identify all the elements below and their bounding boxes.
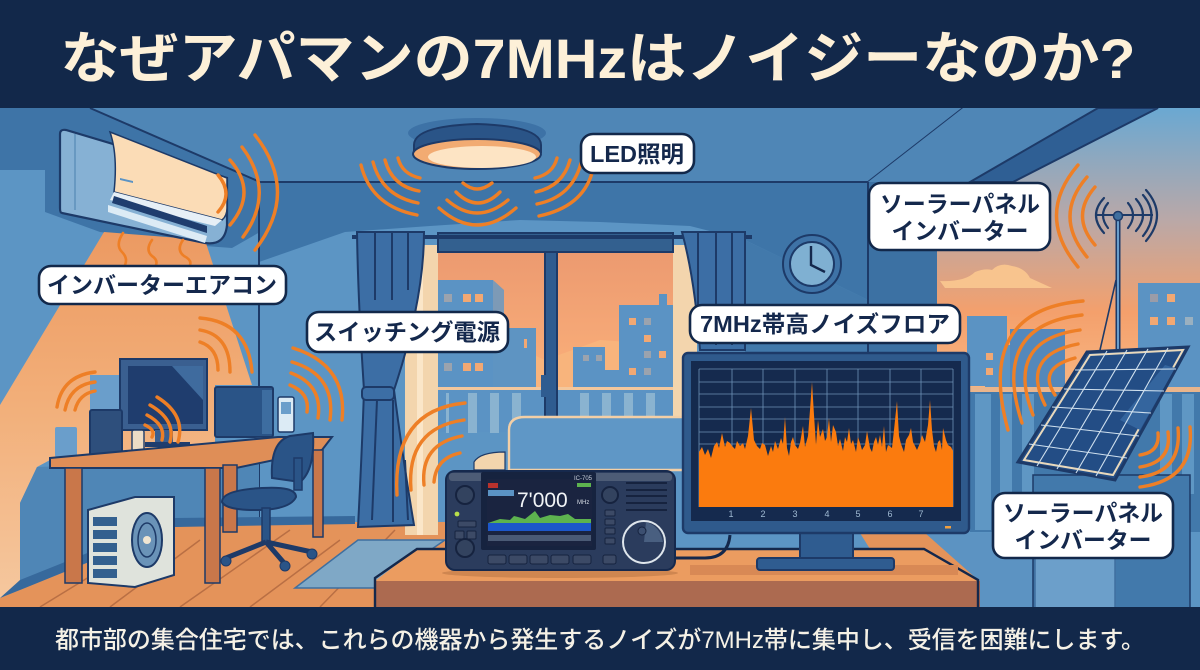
keyboard and mouse [178, 441, 248, 453]
radio display [487, 476, 593, 546]
ceiling light [408, 118, 546, 169]
label: inverter air conditioner [39, 266, 286, 304]
foreground table [375, 549, 980, 607]
desk and PC equipment [50, 359, 332, 583]
pc case [215, 387, 273, 437]
footer caption [0, 607, 1200, 670]
window frame [438, 233, 673, 252]
label: solar inverter bottom [993, 493, 1173, 558]
axis labels: 7 [918, 509, 924, 519]
noise waves: antenna and solar panel [1000, 165, 1095, 430]
title bar: なぜアパマンの7MHzはノイジーなのか? [60, 27, 1136, 90]
solar panel [1018, 347, 1188, 480]
curtains [352, 232, 752, 527]
label: high noise floor: 7MHz帯高ノイズフロア [700, 311, 950, 337]
axis labels: 4 [824, 509, 830, 519]
rug [295, 540, 445, 588]
buildings [438, 280, 493, 388]
label: solar inverter bottom: ソーラーパネル [1003, 500, 1163, 526]
wall clock [783, 235, 841, 293]
label: LED light [581, 134, 694, 173]
footer caption: 都市部の集合住宅では、これらの機器から発生するノイズが7MHz帯に集中し、受信を困難にします。 [55, 627, 1145, 654]
lower wall under desk [20, 460, 259, 590]
right curtain [682, 232, 745, 350]
axis labels: 2 [760, 509, 766, 519]
label: switching power supply [307, 312, 508, 352]
noise spectrum [699, 382, 953, 507]
orange light cone [0, 232, 252, 598]
table top [50, 437, 332, 468]
label: solar inverter top: ソーラーパネル [880, 191, 1040, 217]
axis labels: 1 [728, 509, 734, 519]
sofa [474, 417, 690, 470]
label: solar inverter top: インバーター [892, 218, 1028, 244]
radio display: 7'000 [517, 489, 568, 512]
air conditioner [60, 130, 227, 265]
axis labels: 5 [855, 509, 861, 519]
sky and right view [868, 108, 1200, 400]
window [405, 233, 697, 535]
radio display: IC-705 [574, 476, 593, 482]
balcony rail [438, 387, 673, 390]
left curtain [357, 232, 424, 527]
heat squiggles [119, 233, 190, 265]
label: high noise floor [690, 305, 960, 343]
stand box [1033, 475, 1190, 608]
label: solar inverter bottom: インバーター [1014, 527, 1152, 553]
noise waves: curtain [397, 403, 465, 495]
cable [675, 535, 730, 558]
office chair [221, 433, 317, 571]
label: inverter air conditioner: インバーターエアコン [47, 272, 277, 298]
noise waves: solar inverter box [1140, 427, 1190, 487]
axis labels: 3 [792, 509, 798, 519]
antenna [1096, 190, 1157, 352]
monitor [120, 359, 207, 430]
radio transceiver [446, 471, 675, 570]
balcony right [860, 387, 1200, 608]
floor [0, 516, 445, 608]
noise waves: desk equipment [57, 318, 343, 442]
label: solar inverter top [869, 183, 1050, 250]
title bar [0, 0, 1200, 108]
outdoor AC unit [88, 497, 174, 587]
cloud [940, 265, 1052, 288]
axis labels: 6 [887, 509, 893, 519]
tower [90, 410, 122, 456]
label: LED light: LED照明 [590, 141, 684, 167]
axis labels [728, 509, 924, 519]
noise waves: ceiling light [361, 158, 592, 225]
radio display: MHz [577, 500, 589, 506]
noise waves: air conditioner [218, 135, 278, 250]
spectrum monitor [683, 353, 969, 570]
room background [0, 108, 1200, 608]
label: switching power supply: スイッチング電源 [314, 319, 500, 345]
monitor stand [800, 533, 853, 560]
